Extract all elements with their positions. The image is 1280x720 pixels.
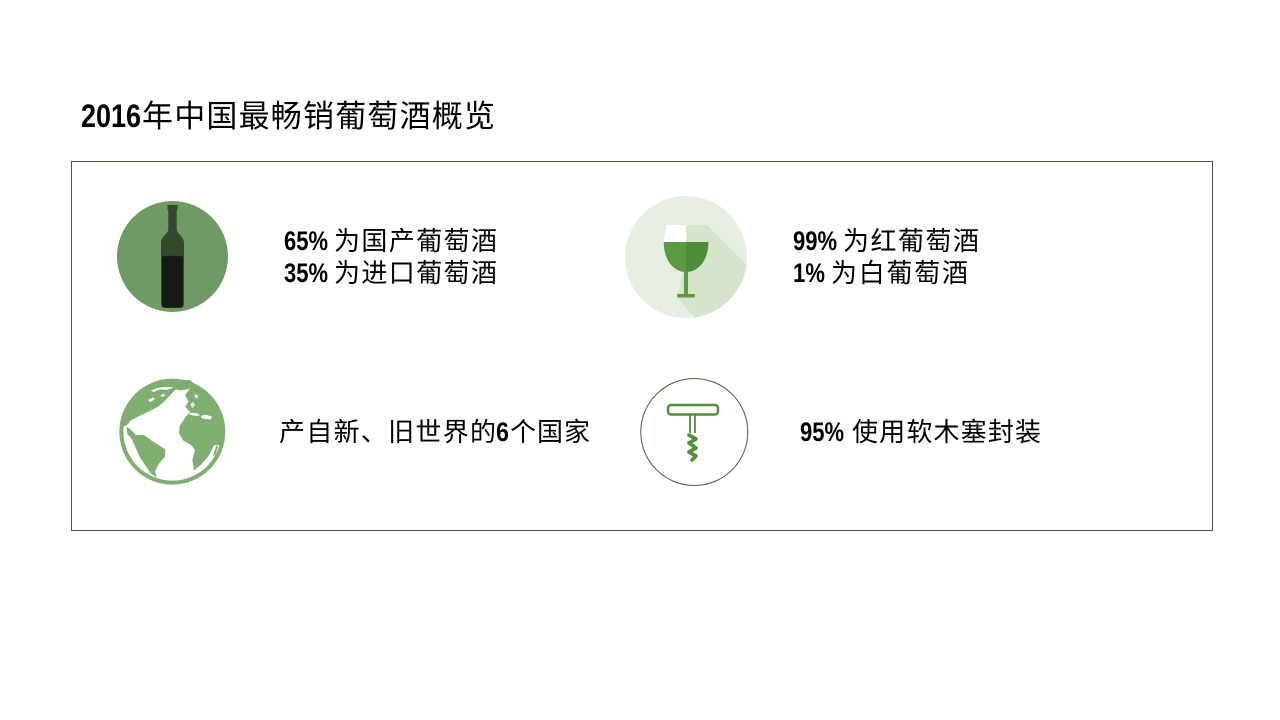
icon: wine bottle bbox=[117, 201, 228, 312]
madagascar bbox=[213, 446, 218, 457]
gulf and caribbean bbox=[130, 423, 146, 435]
text: domestic and imported share: 为进口葡萄酒 bbox=[334, 258, 497, 288]
icon: globe bbox=[119, 379, 225, 485]
text: domestic and imported share bbox=[284, 226, 497, 288]
text: countries of origin: 6 bbox=[496, 417, 509, 447]
text: red and white share: 1% bbox=[793, 258, 825, 288]
text: domestic and imported share: 35% bbox=[284, 258, 328, 288]
arctic band bbox=[149, 380, 202, 391]
icon: wine glass bbox=[625, 196, 747, 318]
text: cork closure share: 95% bbox=[800, 417, 844, 447]
eurasia and africa bbox=[179, 388, 225, 471]
text: domestic and imported share: 为国产葡萄酒 bbox=[334, 226, 497, 256]
text: countries of origin bbox=[279, 417, 590, 447]
text: red and white share: 为白葡萄酒 bbox=[831, 258, 968, 288]
title: 2016 bbox=[81, 98, 141, 134]
title: 年中国最畅销葡萄酒概览 bbox=[142, 99, 495, 134]
text: countries of origin: 产自新、旧世界的 bbox=[279, 417, 496, 447]
north america bbox=[122, 381, 182, 427]
panel: overview frame bbox=[72, 162, 1212, 530]
text: red and white share: 为红葡萄酒 bbox=[843, 226, 979, 256]
ocean bbox=[123, 383, 221, 481]
text: domestic and imported share: 65% bbox=[284, 226, 328, 256]
text: red and white share: 99% bbox=[793, 226, 837, 256]
central america and south america bbox=[127, 427, 165, 477]
arctic ice gaps bbox=[148, 387, 186, 402]
text: cork closure share: 使用软木塞封装 bbox=[852, 417, 1041, 447]
icon: corkscrew bbox=[641, 378, 748, 486]
mediterranean and seas bbox=[189, 394, 212, 419]
text: countries of origin: 个国家 bbox=[510, 417, 590, 447]
text: red and white share bbox=[793, 226, 979, 288]
